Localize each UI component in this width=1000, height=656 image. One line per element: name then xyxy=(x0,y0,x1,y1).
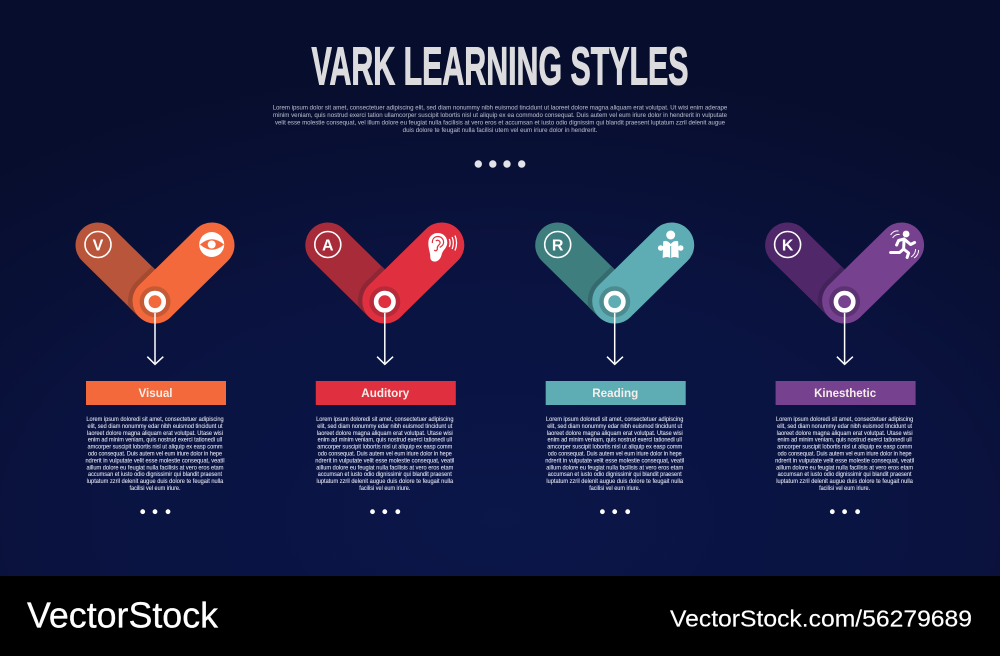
body text: luptatum zzril delenit augue duis dolore te feugait nulla xyxy=(546,479,684,485)
intro text: duis dolore te feugait nulla facilisi utem vel eum iriure dolor in hendrerit. xyxy=(403,128,598,134)
body text: odo consequat. Duis autem vel eum iriure dolor in hepe xyxy=(548,452,682,458)
body text: ndrerit in vulputate velit esse molestie consequat, veatil xyxy=(545,458,684,464)
left pill xyxy=(98,245,155,301)
body text xyxy=(775,417,914,492)
body text: Lorem ipsum doloredi sit amet, consectetuer adipiscing xyxy=(86,417,224,423)
left pill xyxy=(328,245,385,301)
body text: accumsan et iusto odio dignissimir qui blandit praesent xyxy=(548,472,682,478)
intro dots xyxy=(475,160,525,168)
title: VARK LEARNING STYLES xyxy=(312,38,688,97)
panel: Visual xyxy=(85,232,226,514)
right pill xyxy=(155,245,212,301)
body text: odo consequat. Duis autem vel eum iriure dolor in hepe xyxy=(778,452,912,458)
body text: Lorem ipsum doloredi sit amet, consectetuer adipiscing xyxy=(546,417,683,423)
body text: amcorper suscipit lobortis nisl ut aliquip ex easp comm xyxy=(547,445,682,451)
letter badge: R xyxy=(552,237,564,254)
heading bar xyxy=(546,381,686,405)
right pill xyxy=(845,245,902,301)
body text: laoreet dolore magna aliquam erat volutpat. Utase wisi xyxy=(317,431,453,437)
footer url: VectorStock.com/56279689 xyxy=(670,606,972,632)
dots xyxy=(600,509,630,514)
heading bar xyxy=(776,381,916,405)
body text: facilisi vel eum iriure. xyxy=(819,486,870,492)
body text: ndrerit in vulputate velit esse molestie consequat, veatil xyxy=(775,458,914,464)
heading bar: Kinesthetic xyxy=(814,388,877,400)
arrow xyxy=(837,313,853,364)
intro text: Lorem ipsum dolor sit amet, consectetuer adipiscing elit, sed diam nonummy nibh euismod tincidunt ut laoreet dolore magna aliquam erat volutpat. Ut wisi enim aderape xyxy=(273,106,728,112)
pill shadow xyxy=(588,266,615,317)
letter badge xyxy=(545,232,571,258)
body text: facilisi vel eum iriure. xyxy=(359,486,411,492)
body text xyxy=(86,417,224,492)
icon: ear xyxy=(428,233,457,262)
body text: enim ad minim veniam, quis nostrud exerci tationedi ull xyxy=(548,438,682,444)
icon: runner xyxy=(891,231,919,258)
footer bar xyxy=(0,576,1000,656)
pill shadow xyxy=(128,266,155,317)
body text: odo consequat. Duis autem vel eum iriure dolor in hepe xyxy=(88,452,223,458)
pill shadow xyxy=(358,266,385,317)
body text: aillum dolore eu feugiat nulla facilisis at vero eros etam xyxy=(86,465,224,471)
body text: amcorper suscipit lobortis nisl ut aliquip ex easp comm xyxy=(88,445,222,451)
body text: facilisi vel eum iriure. xyxy=(130,486,181,492)
heading bar xyxy=(86,381,226,405)
body text: laoreet dolore magna aliquam erat volutpat. Utase wisi xyxy=(87,431,223,437)
heading bar: Visual xyxy=(138,388,172,400)
body text: ndrerit in vulputate velit esse molestie consequat, veatil xyxy=(86,458,224,464)
body text: elit, sed diam nonummy edar nibh euismod tincidunt ut xyxy=(317,424,453,430)
body text: luptatum zzril delenit augue duis dolore te feugait nulla xyxy=(776,479,914,485)
body text: Lorem ipsum doloredi sit amet, consectetuer adipiscing xyxy=(776,417,913,423)
arrow xyxy=(607,313,623,364)
body text: odo consequat. Duis autem vel eum iriure dolor in hepe xyxy=(318,452,452,458)
node xyxy=(829,286,860,317)
body text: accumsan et iusto odio dignissimir qui blandit praesent xyxy=(318,472,452,478)
icon: reader xyxy=(658,230,684,258)
letter badge: A xyxy=(322,237,334,254)
arrow xyxy=(147,313,163,364)
intro text: velit esse molestie consequat, vel illum dolore eu feugiat nulla facilisis at vero eros et accumsan et iusto odio dignissim qui blandit praesent luptatum zzril delenit augue xyxy=(275,121,726,127)
body text: aillum dolore eu feugiat nulla facilisis at vero eros etam xyxy=(776,465,913,471)
letter badge xyxy=(315,232,341,258)
body text: enim ad minim veniam, quis nostrud exerci tationedi ull xyxy=(777,438,912,444)
node xyxy=(599,286,630,317)
heading bar: Reading xyxy=(592,388,638,400)
letter badge xyxy=(775,232,801,258)
panel: Kinesthetic xyxy=(775,231,919,514)
body text: laoreet dolore magna aliquam erat volutpat. Utase wisi xyxy=(547,431,683,437)
body text: Lorem ipsum doloredi sit amet, consectetuer adipiscing xyxy=(316,417,453,423)
body text: enim ad minim veniam, quis nostrud exerci tationedi ull xyxy=(318,438,452,444)
letter badge xyxy=(85,232,111,258)
icon: eye xyxy=(199,232,224,257)
body text: accumsan et iusto odio dignissimir qui blandit praesent xyxy=(778,472,912,478)
body text: amcorper suscipit lobortis nisl ut aliquip ex easp comm xyxy=(317,445,452,451)
body text: elit, sed diam nonummy edar nibh euismod tincidunt ut xyxy=(777,424,912,430)
body text: aillum dolore eu feugiat nulla facilisis at vero eros etam xyxy=(316,465,453,471)
body text: facilisi vel eum iriure. xyxy=(589,486,640,492)
body text xyxy=(315,417,454,492)
pill shadow xyxy=(818,266,844,317)
heading bar: Auditory xyxy=(361,388,410,400)
intro text xyxy=(273,106,728,134)
dots xyxy=(370,509,400,514)
panel: Auditory xyxy=(315,232,457,514)
right pill xyxy=(385,245,442,301)
left pill xyxy=(788,245,845,301)
node xyxy=(140,286,170,317)
body text: elit, sed diam nonummy edar nibh euismod tincidunt ut xyxy=(88,424,223,430)
body text: luptatum zzril delenit augue duis dolore te feugait nulla xyxy=(87,479,224,485)
node xyxy=(369,286,400,317)
body text: elit, sed diam nonummy edar nibh euismod tincidunt ut xyxy=(547,424,683,430)
body text: aillum dolore eu feugiat nulla facilisis at vero eros etam xyxy=(546,465,683,471)
dots xyxy=(140,509,170,514)
right pill xyxy=(615,245,672,301)
panel: Reading xyxy=(545,230,686,514)
arrow xyxy=(377,313,393,364)
letter badge: V xyxy=(93,237,104,254)
intro text: minim veniam, quis nostrud exerci tation ullamcorper suscipit lobortis nisl ut aliquip ex ea commodo consequat. Duis autem vel eum iriure dolor in hendrerit in vulputate xyxy=(273,113,728,119)
body text: laoreet dolore magna aliquam erat volutpat. Utase wisi xyxy=(777,431,913,437)
body text: enim ad minim veniam, quis nostrud exerci tationedi ull xyxy=(88,438,222,444)
left pill xyxy=(558,245,615,301)
body text: ndrerit in vulputate velit esse molestie consequat, veatil xyxy=(315,458,454,464)
dots xyxy=(830,509,860,514)
heading bar xyxy=(316,381,456,405)
body text: luptatum zzril delenit augue duis dolore te feugait nulla xyxy=(316,479,454,485)
letter badge: K xyxy=(782,237,794,254)
body text: accumsan et iusto odio dignissimir qui blandit praesent xyxy=(88,472,222,478)
body text: amcorper suscipit lobortis nisl ut aliquip ex easp comm xyxy=(777,445,912,451)
body text xyxy=(545,417,684,492)
footer brand: VectorStock xyxy=(27,594,219,636)
